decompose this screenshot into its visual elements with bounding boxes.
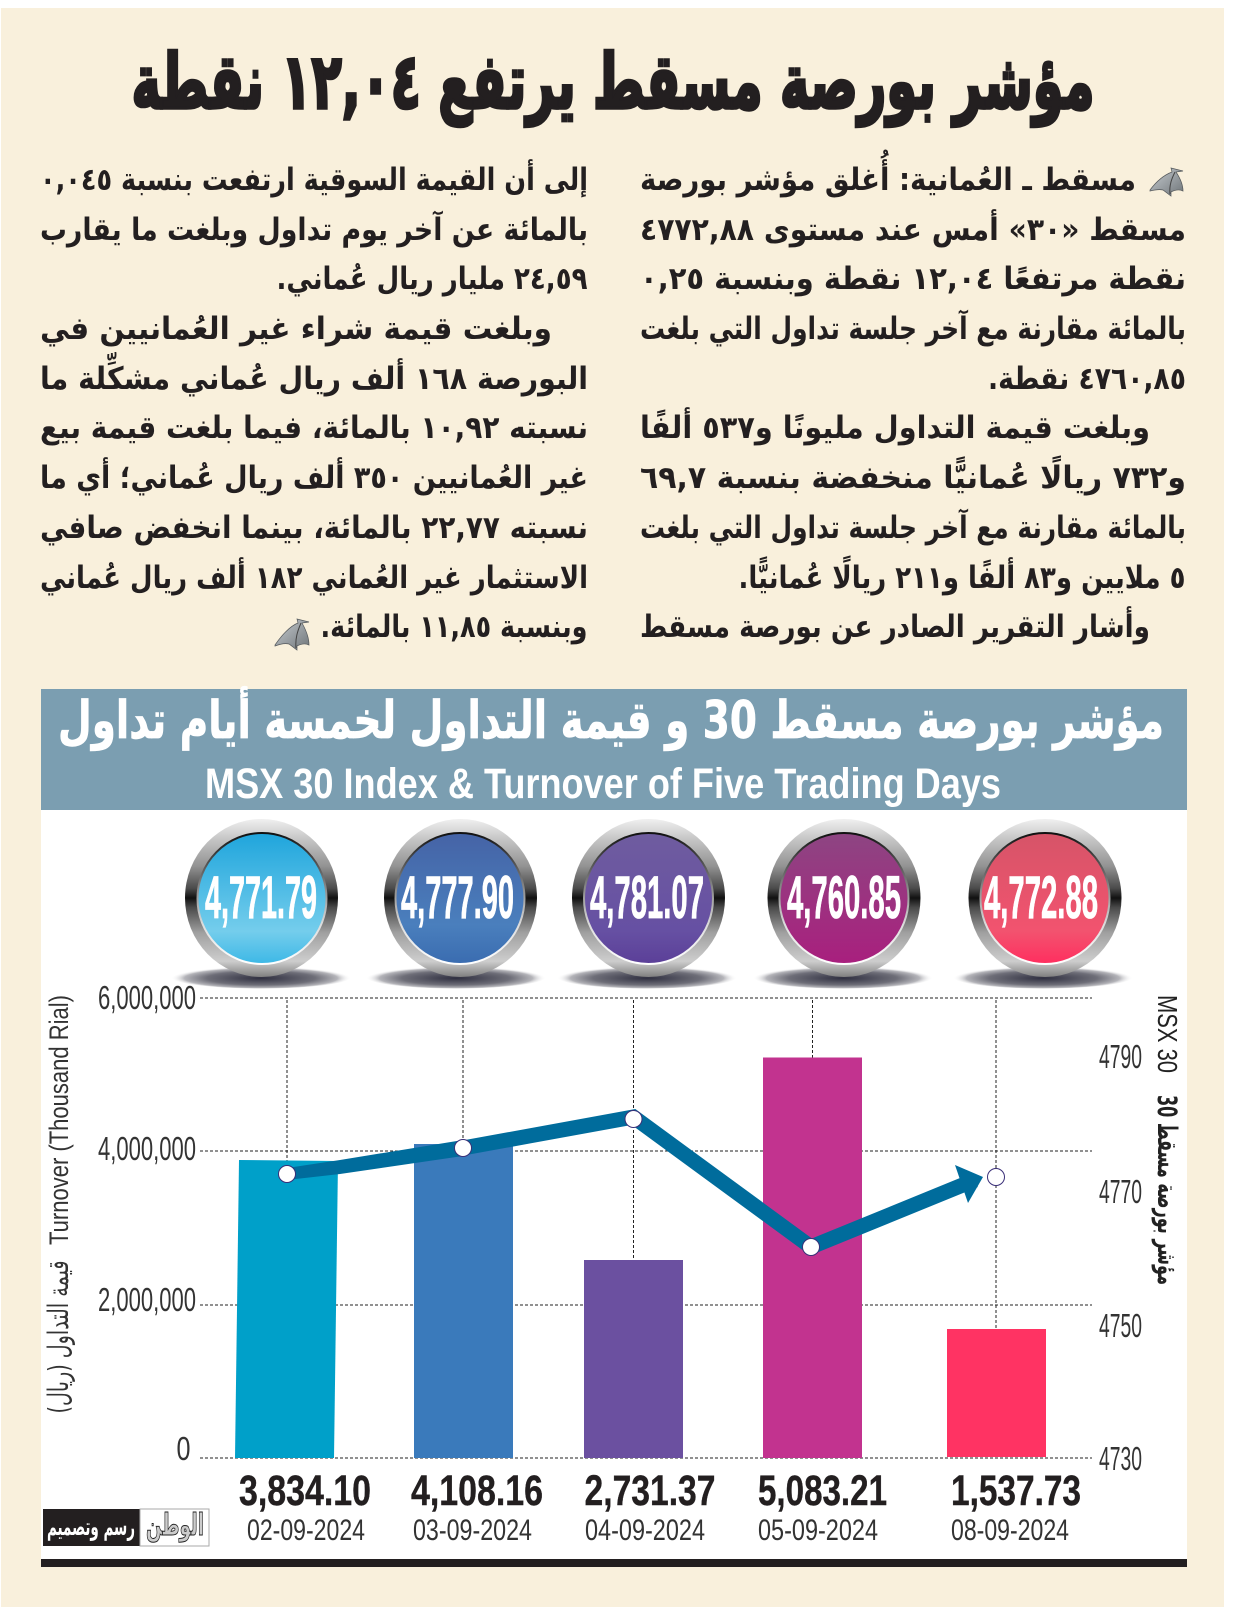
icon: sail left column	[275, 619, 309, 650]
chart panel background	[41, 810, 1187, 1559]
right axis ticks: 4750	[1099, 1307, 1142, 1344]
logo: Al Watan design credit	[43, 1508, 209, 1546]
left axis title	[42, 995, 75, 1414]
turnover values: 4,108.16	[411, 1467, 543, 1515]
index badge: 4,760.85: 4,760.85	[787, 864, 901, 931]
index badge: 4,771.79: 4,771.79	[205, 864, 317, 931]
trading dates: 02-09-2024	[247, 1514, 365, 1547]
left axis ticks: 2,000,000	[98, 1281, 196, 1318]
article text: right column: نقطة مرتفعًا ١٢,٠٤ نقطة وبنسبة ٠,٢٥	[640, 261, 1186, 297]
icon: sail right column	[1150, 168, 1183, 196]
article text: right column: و٧٣٢ ريالًا عُمانيًّا منخفضة بنسبة ٦٩,٧	[640, 455, 1186, 496]
right axis ticks	[1099, 1038, 1142, 1477]
index badge: 4,781.07: 4,781.07	[590, 864, 704, 931]
article text: left column	[40, 159, 588, 645]
bottom rule	[41, 1559, 1187, 1567]
left axis ticks	[98, 979, 196, 1467]
bar chart: turnover	[235, 1058, 1046, 1458]
turnover values	[239, 1467, 1081, 1515]
article text: left column: الاستثمار غير العُماني ١٨٢ ألف ريال عُماني	[40, 557, 588, 596]
right axis title: MSX 30	[1152, 995, 1183, 1073]
article text: left column: وبنسبة ١١,٨٥ بالمائة.	[321, 609, 588, 645]
article text: right column: وأشار التقرير الصادر عن بورصة مسقط	[640, 606, 1150, 645]
article text: right column	[640, 148, 1186, 645]
right axis ticks: 4730	[1099, 1440, 1142, 1477]
trading dates: 08-09-2024	[951, 1514, 1069, 1547]
index badge: 4,777.90: 4,777.90	[401, 864, 514, 931]
right axis ticks: 4770	[1099, 1173, 1142, 1210]
line chart: MSX 30 index arrow	[278, 1110, 1004, 1256]
article text: right column: مسقط «٣٠» أمس عند مستوى ٤٧٧٢,٨٨	[640, 209, 1186, 248]
right axis ticks: 4790	[1099, 1038, 1142, 1075]
turnover values: 1,537.73	[951, 1467, 1081, 1515]
right axis title: مؤشر بورصة مسقط 30	[1151, 1095, 1182, 1285]
logo: Al Watan design credit: رسم وتصميم	[47, 1513, 135, 1541]
article text: right column: وبلغت قيمة التداول مليونًا و٥٣٧ ألفًا	[640, 407, 1150, 446]
article text: left column: إلى أن القيمة السوقية ارتفعت بنسبة ٠,٠٤٥	[40, 159, 588, 198]
trading dates	[247, 1514, 1069, 1547]
left axis ticks: 0	[176, 1430, 190, 1467]
index badge: 4,760.85	[753, 819, 933, 988]
trading dates: 04-09-2024	[585, 1514, 705, 1547]
article text: right column: ٤٧٦٠,٨٥ نقطة.	[988, 361, 1186, 397]
trading dates: 05-09-2024	[758, 1514, 878, 1547]
left axis ticks: 4,000,000	[98, 1130, 196, 1167]
article text: left column: غير العُمانيين ٣٥٠ ألف ريال عُماني؛ أي ما	[40, 457, 588, 496]
article text: right column: مسقط ـ العُمانية: أُغلق مؤشر بورصة	[640, 148, 1136, 198]
index badge: 4,771.79	[171, 819, 351, 988]
left axis title: قيمة التداول (ريال)	[42, 1260, 75, 1414]
index badge: 4,781.07	[557, 819, 737, 988]
index badge: 4,777.90	[366, 819, 546, 988]
logo: Al Watan design credit: الوطن	[146, 1508, 204, 1543]
left axis ticks: 6,000,000	[98, 979, 196, 1016]
left axis title: Turnover (Thousand Rial)	[44, 995, 74, 1245]
chart grid lines	[200, 998, 1092, 1458]
index badge: 4,772.88	[953, 819, 1133, 988]
article text: left column: نسبته ١٠,٩٢ بالمائة، فيما بلغت قيمة بيع	[40, 410, 588, 446]
article text: right column: ٥ ملايين و٨٣ ألفًا و٢١١ ريالًا عُمانيًّا.	[738, 555, 1185, 596]
article text: left column: ٢٤,٥٩ مليار ريال عُماني.	[276, 261, 588, 297]
turnover values: 3,834.10	[239, 1467, 371, 1515]
article text: left column: بالمائة عن آخر يوم تداول وبلغت ما يقارب	[40, 210, 588, 248]
chart header band: MSX 30 Index & Turnover of Five Trading Days	[205, 760, 1001, 808]
chart header band	[41, 686, 1187, 810]
turnover values: 2,731.37	[584, 1467, 716, 1515]
article text: left column: البورصة ١٦٨ ألف ريال عُماني مشكِّلة ما	[40, 352, 588, 397]
index badge: 4,772.88: 4,772.88	[984, 864, 1098, 931]
article text: left column: وبلغت قيمة شراء غير العُمانيين في	[40, 311, 552, 347]
right axis title	[1151, 995, 1183, 1285]
turnover values: 5,083.21	[758, 1467, 887, 1515]
article text: left column: نسبته ٢٢,٧٧ بالمائة، بينما انخفض صافي	[40, 510, 588, 546]
trading dates: 03-09-2024	[413, 1514, 532, 1547]
